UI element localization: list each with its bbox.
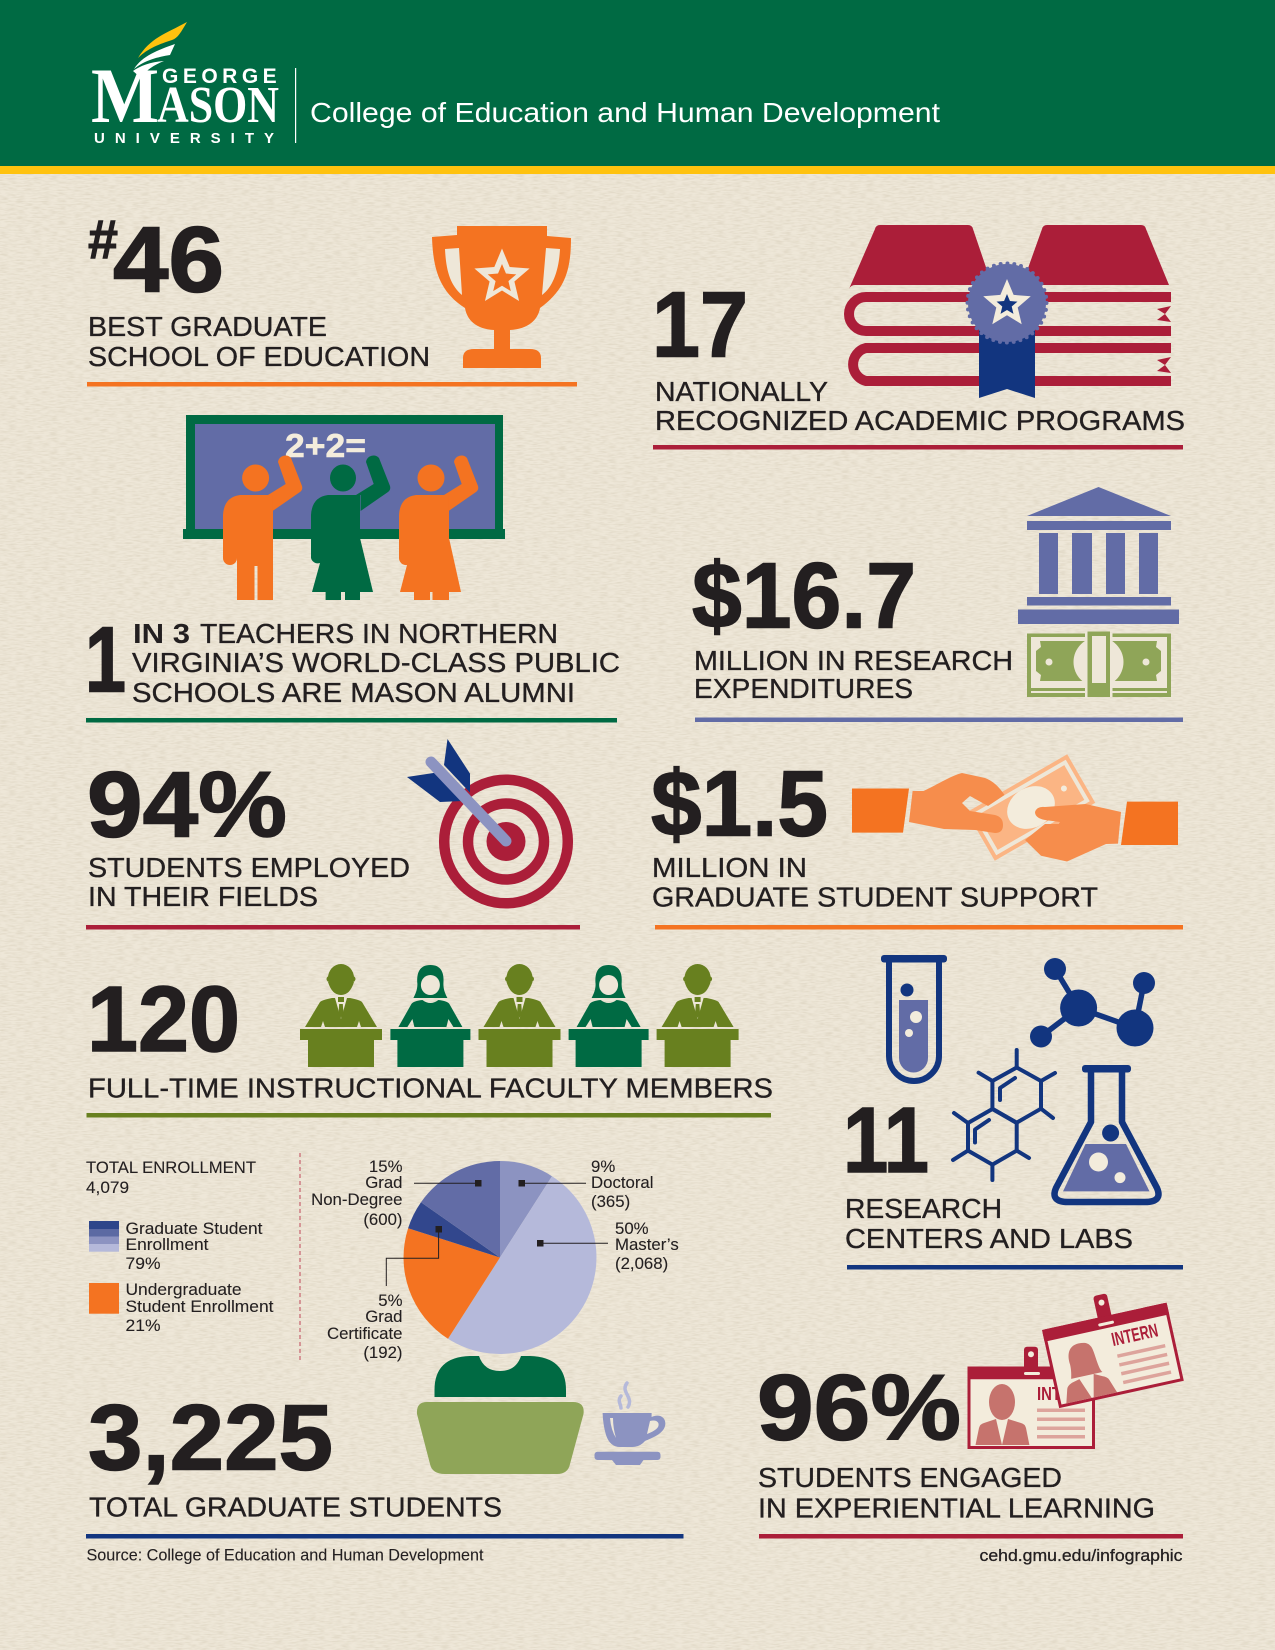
logo: George Mason University: UNIVERSITY	[94, 130, 284, 147]
panel: $1.5 million support	[651, 752, 1183, 930]
icon: molecule	[1030, 958, 1155, 1048]
label: CENTERS AND LABS	[845, 1223, 1133, 1254]
label: master's: 50%	[615, 1219, 649, 1238]
logo: George Mason University: M	[91, 52, 159, 139]
label: MILLION IN	[652, 852, 807, 883]
enrollment total: TOTAL ENROLLMENT	[86, 1158, 256, 1177]
teacher 3	[399, 456, 478, 600]
label	[655, 376, 1185, 436]
panel: $16.7 million research	[692, 487, 1183, 722]
panel: total enrollment legend	[86, 1158, 274, 1335]
chalkboard equation: 2+2=	[285, 427, 366, 464]
label: FULL-TIME INSTRUCTIONAL FACULTY MEMBERS	[88, 1073, 773, 1104]
legend: graduate enrollment: Enrollment	[126, 1235, 209, 1254]
label: STUDENTS EMPLOYED	[88, 852, 410, 883]
icon: laptop	[417, 1402, 584, 1474]
logo: George Mason University: ASON	[157, 77, 279, 134]
label: master's: (2,068)	[615, 1254, 668, 1273]
label	[652, 852, 1098, 912]
panel: 11 research centers	[843, 955, 1183, 1270]
label	[88, 852, 410, 912]
icon: trophy	[432, 226, 571, 368]
icon: intern badge front: INT	[1037, 1384, 1061, 1404]
label: NATIONALLY	[655, 376, 828, 407]
stat: 3,225: 3,225	[88, 1386, 333, 1490]
stat: #46: #	[88, 208, 118, 270]
website url: cehd.gmu.edu/infographic	[980, 1547, 1182, 1565]
logo: George Mason University	[91, 22, 284, 147]
legend: graduate enrollment: Graduate Student	[126, 1219, 263, 1238]
label: grad non-degree: (600)	[363, 1210, 402, 1229]
label: grad non-degree	[311, 1157, 403, 1229]
icon: student shoulders	[434, 1356, 566, 1397]
label: TOTAL GRADUATE STUDENTS	[89, 1492, 502, 1523]
label: master's: Master’s	[615, 1235, 679, 1254]
label: grad non-degree: Grad	[365, 1173, 402, 1192]
leader lines	[386, 1180, 608, 1286]
header band	[0, 0, 1275, 174]
icon: chalkboard with teachers	[183, 415, 505, 600]
label: grad non-degree: 15%	[369, 1157, 403, 1176]
icon: hexagon compound	[953, 1050, 1055, 1180]
panel: 96% experiential learning	[757, 1281, 1183, 1538]
icon: intern badge back	[1037, 1281, 1183, 1407]
label: TEACHERS IN NORTHERN	[200, 618, 558, 649]
label	[845, 1193, 1133, 1254]
panel: #46 best graduate school	[87, 208, 577, 386]
label: IN THEIR FIELDS	[88, 881, 318, 912]
teacher 2	[311, 456, 390, 600]
stat: 94%: 94%	[87, 752, 287, 856]
label: grad certificate	[327, 1291, 403, 1362]
faculty member 5	[657, 964, 739, 1067]
icon: faculty row	[300, 964, 739, 1067]
stat: 1: 1	[85, 608, 126, 712]
label: doctoral	[591, 1157, 654, 1211]
label: BEST GRADUATE	[88, 311, 327, 342]
label: VIRGINIA’S WORLD-CLASS PUBLIC	[132, 647, 620, 678]
icon: banknotes	[1027, 632, 1171, 697]
legend: graduate enrollment	[89, 1219, 263, 1273]
label: STUDENTS ENGAGED	[758, 1462, 1062, 1493]
label: doctoral: Doctoral	[591, 1173, 654, 1192]
label: grad certificate: Grad	[365, 1307, 402, 1326]
source note: Source: College of Education and Human Development	[86, 1546, 484, 1565]
panel: 1 in 3 teachers	[85, 415, 620, 722]
label: grad certificate: (192)	[363, 1343, 402, 1362]
label: MILLION IN RESEARCH	[694, 645, 1013, 676]
stat: 11: 11	[843, 1088, 929, 1192]
label: EXPENDITURES	[694, 673, 913, 704]
label: RECOGNIZED ACADEMIC PROGRAMS	[655, 405, 1185, 436]
icon: coffee cup	[594, 1383, 665, 1465]
icon: books with ribbon	[849, 225, 1171, 398]
faculty member 3	[478, 964, 560, 1067]
label: doctoral: (365)	[591, 1192, 630, 1211]
faculty member 4	[569, 965, 649, 1067]
label: SCHOOL OF EDUCATION	[88, 341, 430, 372]
logo divider	[295, 68, 296, 143]
icon: hands exchanging money	[852, 754, 1178, 862]
stat: 96%: 96%	[757, 1356, 961, 1460]
icon: intern badge front	[968, 1347, 1095, 1448]
faculty member 2	[390, 965, 470, 1067]
label: grad certificate: 5%	[378, 1291, 403, 1310]
label: IN EXPERIENTIAL LEARNING	[758, 1493, 1155, 1524]
legend: undergraduate enrollment: Undergraduate	[126, 1280, 242, 1299]
label: grad non-degree: Non-Degree	[311, 1190, 402, 1209]
stat: $1.5: $1.5	[651, 752, 828, 856]
label: SCHOOLS ARE MASON ALUMNI	[132, 677, 575, 708]
label	[758, 1462, 1155, 1524]
legend: undergraduate enrollment	[89, 1280, 274, 1335]
label: IN 3	[133, 618, 190, 649]
stat: $16.7: $16.7	[692, 544, 916, 648]
panel: 17 academic programs	[652, 225, 1185, 450]
label	[132, 618, 620, 708]
legend: undergraduate enrollment: Student Enrollment	[126, 1297, 274, 1316]
icon: intern badge back: INTERN	[1110, 1320, 1160, 1351]
icon: test tube	[881, 955, 947, 1081]
label	[694, 645, 1013, 704]
label: grad certificate: Certificate	[327, 1324, 402, 1343]
label: RESEARCH	[845, 1193, 1002, 1224]
panel: 3,225 graduate students	[86, 1356, 684, 1538]
teacher 1	[223, 456, 302, 600]
label: doctoral: 9%	[591, 1157, 615, 1176]
enrollment total: 4,079	[86, 1178, 129, 1197]
legend: graduate enrollment: 79%	[126, 1254, 161, 1273]
legend: undergraduate enrollment: 21%	[126, 1316, 161, 1335]
stat: #46: 46	[113, 208, 224, 312]
panel: 120 faculty	[86, 964, 773, 1118]
college name: College of Education and Human Development	[310, 97, 940, 128]
stat: 17: 17	[652, 272, 748, 376]
label: GRADUATE STUDENT SUPPORT	[652, 882, 1098, 912]
faculty member 1	[300, 964, 382, 1067]
icon: bank building	[1018, 487, 1179, 624]
icon: flask	[1054, 1065, 1158, 1202]
label	[88, 311, 430, 372]
enrollment total	[86, 1158, 256, 1197]
logo: George Mason University: GEORGE	[162, 65, 281, 88]
label: master's	[615, 1219, 679, 1273]
icon: target with arrow	[407, 739, 568, 903]
panel: 94% employed	[86, 739, 580, 930]
stat: 120: 120	[87, 967, 240, 1071]
pie chart: graduate enrollment by program	[311, 1157, 679, 1362]
